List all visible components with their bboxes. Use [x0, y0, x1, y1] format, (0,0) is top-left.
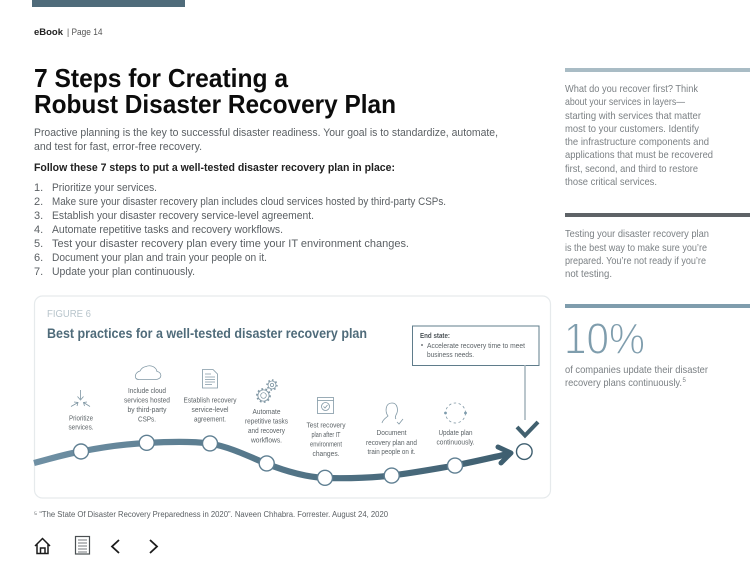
icon: gears: [257, 380, 277, 402]
statistic caption: [565, 364, 708, 389]
timeline markers: [74, 435, 532, 485]
step 6: document and train: [366, 403, 417, 456]
top accent bar: [32, 0, 185, 7]
sidebar note: testing: is the best way to make sure you’re: [565, 242, 707, 254]
page header: [34, 27, 102, 38]
panel: figure 6: [34, 296, 550, 498]
step 2: cloud services: [124, 366, 170, 424]
step 1: prioritize: services.: [68, 424, 94, 432]
icon: document: [202, 370, 218, 388]
sidebar note: recover first: the infrastructure components and: [565, 136, 709, 148]
seven steps list: [34, 182, 446, 278]
icon: person check: [382, 403, 403, 424]
step 5: test recovery plan: changes.: [312, 451, 340, 458]
statistic caption: of companies update their disaster: [565, 364, 708, 376]
icon: cloud: [135, 366, 161, 380]
step 2: cloud services: services hosted: [124, 398, 170, 404]
step 4: automate: workflows.: [250, 438, 282, 444]
sidebar note: recover first: first, second, and third to restore: [565, 163, 698, 175]
sidebar note: recover first: [565, 83, 713, 188]
sidebar note: recover first: those critical services.: [565, 176, 657, 188]
step 6: document and train: recovery plan and: [366, 440, 417, 447]
step 6: document and train: train people on it.: [368, 449, 416, 456]
seven steps list: Make sure your disaster recovery plan includes cloud services hosted by third-party CSPs.: [52, 196, 446, 208]
step 5: test recovery plan: environment: [310, 442, 342, 448]
title: [34, 63, 396, 119]
icon: dashed cycle: [444, 403, 467, 423]
statistic caption: recovery plans continuously.: [565, 377, 682, 389]
step 4: automate: and recovery: [248, 428, 285, 435]
step 1: prioritize: Prioritize: [69, 416, 93, 422]
step 3: service-level agreement: service-level: [192, 407, 229, 414]
footnote: ⁵ “The State Of Disaster Recovery Preparedness in 2020”. Naveen Chhabra. Forrester. August 24, 2020: [34, 510, 389, 519]
sidebar note: testing: not testing.: [565, 268, 612, 280]
sidebar note: recover first: applications that must be recovered: [565, 149, 713, 161]
step 7: update continuously: [436, 403, 475, 446]
step 6: document and train: Document: [376, 430, 407, 437]
seven steps list: 4.: [34, 224, 43, 236]
figure heading: Best practices for a well-tested disaster recovery plan: [47, 326, 367, 341]
seven steps list: 7.: [34, 266, 43, 278]
intro paragraph: Proactive planning is the key to successful disaster readiness. Your goal is to standardize, automate,: [34, 127, 498, 139]
sidebar note: recover first: about your services in layers—: [565, 96, 685, 108]
page header: | Page 14: [67, 27, 102, 38]
sidebar note: recover first: most to your customers. Identify: [565, 123, 700, 135]
seven steps list: 3.: [34, 210, 43, 222]
step 3: service-level agreement: Establish recovery: [184, 398, 237, 404]
step 5: test recovery plan: [306, 398, 346, 458]
sidebar rule 2: [565, 213, 750, 217]
callout connector: [524, 365, 526, 420]
step 7: update continuously: Update plan: [438, 430, 473, 437]
icon: contents list: [76, 536, 90, 554]
list heading: Follow these 7 steps to put a well-tested disaster recovery plan in place:: [34, 162, 395, 174]
icon: check mark: [517, 422, 538, 436]
callout: end state: [412, 326, 539, 366]
icon: converging arrows: [71, 390, 90, 406]
statistic caption: 5: [682, 378, 686, 384]
page header: eBook: [34, 27, 64, 38]
seven steps list: Automate repetitive tasks and recovery workflows.: [52, 224, 283, 236]
seven steps list: Establish your disaster recovery service-level agreement.: [52, 210, 314, 222]
seven steps list: 6.: [34, 252, 43, 264]
icon: next arrow: [150, 540, 157, 553]
step 2: cloud services: by third-party: [128, 407, 167, 414]
step 2: cloud services: Include cloud: [128, 388, 166, 395]
callout: end state: business needs.: [427, 352, 474, 359]
sidebar note: testing: [565, 228, 709, 280]
seven steps list: 1.: [34, 182, 43, 194]
sidebar rule 1: [565, 68, 750, 72]
icon: browser check: [318, 398, 334, 414]
timeline arrow: [34, 442, 511, 478]
sidebar note: testing: prepared. You’re not ready if you’re: [565, 255, 706, 267]
seven steps list: Update your plan continuously.: [52, 266, 195, 278]
figure label: FIGURE 6: [47, 308, 91, 320]
callout: end state: Accelerate recovery time to meet: [427, 343, 525, 350]
intro paragraph: [34, 127, 498, 153]
statistic: 10 percent: 10%: [564, 314, 645, 364]
title: Robust Disaster Recovery Plan: [34, 89, 396, 119]
icon: home: [35, 538, 50, 554]
callout: end state: End state:: [420, 333, 450, 340]
step 7: update continuously: continuously.: [436, 440, 475, 446]
sidebar rule 3: [565, 304, 750, 308]
seven steps list: Test your disaster recovery plan every time your IT environment changes.: [52, 238, 409, 250]
step 2: cloud services: CSPs.: [138, 416, 156, 424]
sidebar note: recover first: What do you recover first? Think: [565, 83, 699, 95]
step 4: automate: Automate: [252, 409, 281, 416]
step 4: automate: repetitive tasks: [245, 418, 288, 426]
sidebar note: testing: Testing your disaster recovery plan: [565, 228, 709, 240]
step 3: service-level agreement: agreement.: [194, 416, 226, 424]
icon: previous arrow: [112, 540, 119, 553]
intro paragraph: and test for fast, error-free recovery.: [34, 141, 202, 153]
seven steps list: Document your plan and train your people on it.: [52, 252, 267, 264]
seven steps list: 5.: [34, 238, 43, 250]
seven steps list: Prioritize your services.: [52, 182, 157, 194]
step 5: test recovery plan: Test recovery: [306, 422, 346, 430]
step 5: test recovery plan: plan after IT: [312, 432, 341, 439]
step 3: service-level agreement: [184, 370, 237, 424]
step 1: prioritize: [68, 390, 94, 432]
seven steps list: 2.: [34, 196, 43, 208]
step 4: automate: [245, 380, 288, 444]
sidebar note: recover first: starting with services that matter: [565, 110, 701, 122]
title: 7 Steps for Creating a: [34, 63, 289, 93]
